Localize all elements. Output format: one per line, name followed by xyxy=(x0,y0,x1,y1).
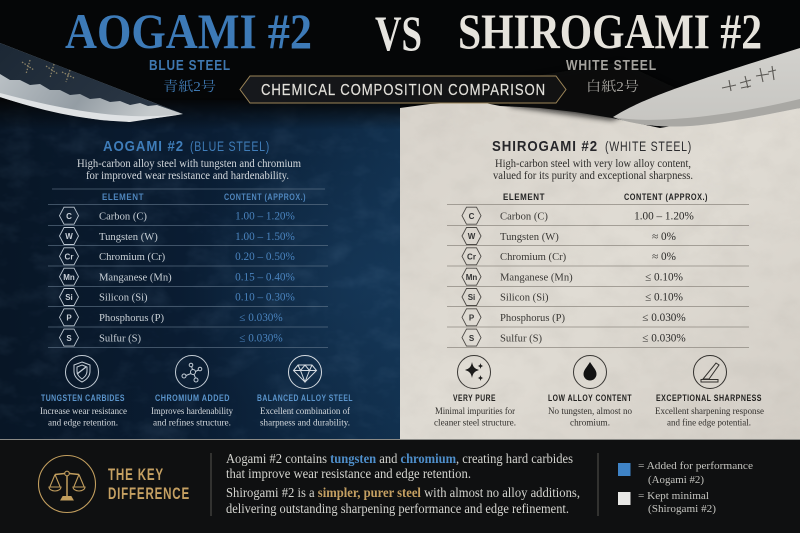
blue description xyxy=(77,158,301,182)
element symbols: P xyxy=(469,314,475,322)
subtitle: blue steel: 青紙2号 xyxy=(163,78,216,94)
content values: 1.00 – 1.50% xyxy=(235,231,295,243)
feature: tungsten carbides xyxy=(40,356,127,428)
element symbols: Cr xyxy=(467,252,476,262)
element names: Phosphorus (P) xyxy=(99,313,165,324)
knife: right xyxy=(613,48,800,127)
element names: Carbon (C) xyxy=(99,212,147,222)
feature: tungsten carbides: and edge retention. xyxy=(48,418,118,428)
icon: diamond xyxy=(288,356,322,388)
feature: very pure: cleaner steel structure. xyxy=(434,418,516,428)
subtitle: blue steel: BLUE STEEL xyxy=(149,58,231,74)
feature: low alloy content: No tungsten, almost no xyxy=(548,407,632,417)
subtitle: white steel xyxy=(566,58,657,94)
white composition table xyxy=(447,192,749,348)
element names: Carbon (C) xyxy=(500,212,548,222)
key difference text: Shirogami #2 is a simpler, purer steel with almost no alloy additions, xyxy=(226,485,580,500)
feature: low alloy content xyxy=(548,356,632,428)
feature: exceptional sharpness: and fine edge potential. xyxy=(667,418,751,428)
element names: Chromium (Cr) xyxy=(99,252,166,263)
blue heading xyxy=(103,138,270,155)
key difference text: Aogami #2 contains tungsten and chromium, creating hard carbides xyxy=(226,451,573,466)
feature: tungsten carbides: TUNGSTEN CARBIDES xyxy=(41,393,125,404)
key difference heading xyxy=(108,466,190,503)
element symbols: Mn xyxy=(466,273,477,282)
blue description: High-carbon alloy steel with tungsten and chromium xyxy=(77,158,301,170)
key difference text: delivering outstanding sharpening performance and edge refinement. xyxy=(226,501,569,516)
table header xyxy=(503,192,708,203)
feature: balanced alloy steel: BALANCED ALLOY STEEL xyxy=(257,393,353,404)
content values: ≤ 0.030% xyxy=(239,332,283,344)
element symbols: Mn xyxy=(63,273,75,282)
element symbols: Cr xyxy=(65,252,73,262)
panel: the key difference xyxy=(0,439,800,533)
panel: blue steel xyxy=(0,98,400,439)
element symbols xyxy=(63,212,75,343)
element names: Manganese (Mn) xyxy=(99,272,172,284)
content values xyxy=(634,210,694,344)
banner: chemical composition comparison xyxy=(240,76,566,103)
legend: (Shirogami #2) xyxy=(648,503,716,515)
knife engraving xyxy=(722,66,776,91)
content values: ≈ 0% xyxy=(652,251,676,263)
element names: Tungsten (W) xyxy=(500,232,559,243)
content values: 0.10 – 0.30% xyxy=(235,292,295,304)
feature: very pure: VERY PURE xyxy=(453,393,496,404)
element names: Silicon (Si) xyxy=(500,292,549,304)
feature: tungsten carbides: Increase wear resistance xyxy=(40,407,127,417)
icon: molecule xyxy=(176,356,208,388)
feature: balanced alloy steel: sharpness and durability. xyxy=(260,418,350,428)
legend: = Kept minimal xyxy=(638,490,709,502)
feature: exceptional sharpness: Excellent sharpening response xyxy=(655,407,764,417)
subtitle: blue steel xyxy=(149,58,231,94)
element names: Manganese (Mn) xyxy=(500,272,573,284)
feature: balanced alloy steel: Excellent combination of xyxy=(260,406,351,417)
element symbols: Si xyxy=(468,293,475,302)
icon: sparkles xyxy=(458,356,490,388)
icon: blade on whetstone xyxy=(694,356,726,388)
table header: CONTENT (APPROX.) xyxy=(224,192,306,203)
white heading xyxy=(492,138,692,155)
blue composition table xyxy=(48,189,328,348)
white heading: SHIROGAMI #2 xyxy=(492,138,598,155)
content values: ≤ 0.030% xyxy=(642,312,686,324)
table header: ELEMENT xyxy=(102,192,144,203)
element symbols: C xyxy=(66,212,72,221)
feature: chromium added: and refines structure. xyxy=(153,418,231,428)
knife engraving xyxy=(22,60,74,82)
table header: CONTENT (APPROX.) xyxy=(624,192,708,203)
element names xyxy=(500,212,573,344)
subtitle: white steel: 白紙2号 xyxy=(586,79,639,94)
key difference text xyxy=(226,451,580,516)
element names xyxy=(99,212,172,344)
smoke shadow under knife xyxy=(500,62,680,120)
legend: (Aogami #2) xyxy=(648,474,704,486)
knife: left xyxy=(0,43,183,122)
element hexagons xyxy=(462,207,481,346)
feature: exceptional sharpness xyxy=(655,356,764,428)
element symbols: C xyxy=(469,212,475,221)
content values: ≈ 0% xyxy=(652,231,676,243)
content values: ≤ 0.030% xyxy=(239,312,283,324)
feature: low alloy content: chromium. xyxy=(570,418,610,428)
banner: chemical composition comparison: CHEMICAL COMPOSITION COMPARISON xyxy=(261,82,546,99)
content values xyxy=(235,210,295,344)
blue description: for improved wear resistance and hardenability. xyxy=(86,170,289,182)
content values: 0.20 – 0.50% xyxy=(235,251,295,263)
feature: chromium added: Improves hardenability xyxy=(151,407,233,417)
blue heading: (BLUE STEEL) xyxy=(190,138,270,154)
element hexagons xyxy=(60,207,78,346)
element names: Sulfur (S) xyxy=(99,334,142,344)
feature: very pure: Minimal impurities for xyxy=(435,406,516,417)
element symbols: W xyxy=(65,232,73,241)
icon: oil drop xyxy=(574,356,606,388)
feature: chromium added: CHROMIUM ADDED xyxy=(155,393,230,404)
white description: valued for its purity and exceptional sharpness. xyxy=(493,170,693,182)
element names: Silicon (Si) xyxy=(99,292,148,304)
element symbols xyxy=(466,212,477,343)
legend xyxy=(618,460,753,515)
element names: Phosphorus (P) xyxy=(500,313,566,324)
element symbols: S xyxy=(66,334,72,343)
icon: shield xyxy=(66,356,98,388)
element names: Chromium (Cr) xyxy=(500,252,567,263)
panel: white steel xyxy=(400,100,800,439)
feature: balanced alloy steel xyxy=(257,356,353,428)
white description: High-carbon steel with very low alloy content, xyxy=(495,158,691,170)
blue heading: AOGAMI #2 xyxy=(103,138,184,155)
element symbols: P xyxy=(66,314,72,322)
table header xyxy=(102,192,306,203)
key difference text: that improve wear resistance and edge retention. xyxy=(226,466,471,481)
element symbols: Si xyxy=(65,293,73,302)
white description xyxy=(493,158,693,182)
content values: 1.00 – 1.20% xyxy=(634,210,694,222)
content values: 1.00 – 1.20% xyxy=(235,210,295,222)
title: vs: VS xyxy=(375,5,422,61)
key difference heading: THE KEY xyxy=(108,466,164,484)
content values: ≤ 0.10% xyxy=(645,292,683,304)
white heading: (WHITE STEEL) xyxy=(605,138,692,154)
element names: Tungsten (W) xyxy=(99,232,158,243)
key difference heading: DIFFERENCE xyxy=(108,485,190,503)
feature: exceptional sharpness: EXCEPTIONAL SHARPNESS xyxy=(656,393,762,404)
element symbols: S xyxy=(469,334,475,343)
feature: very pure xyxy=(434,356,516,428)
element symbols: W xyxy=(468,232,476,241)
feature: low alloy content: LOW ALLOY CONTENT xyxy=(548,393,632,404)
element names: Sulfur (S) xyxy=(500,334,543,344)
table header: ELEMENT xyxy=(503,192,545,203)
content values: ≤ 0.030% xyxy=(642,332,686,344)
title: aogami: AOGAMI #2 xyxy=(65,3,312,59)
content values: 0.15 – 0.40% xyxy=(235,272,295,284)
subtitle: white steel: WHITE STEEL xyxy=(566,58,657,74)
legend: = Added for performance xyxy=(638,460,753,472)
feature: chromium added xyxy=(151,356,233,428)
content values: ≤ 0.10% xyxy=(645,272,683,284)
icon: balance scale xyxy=(38,456,96,512)
